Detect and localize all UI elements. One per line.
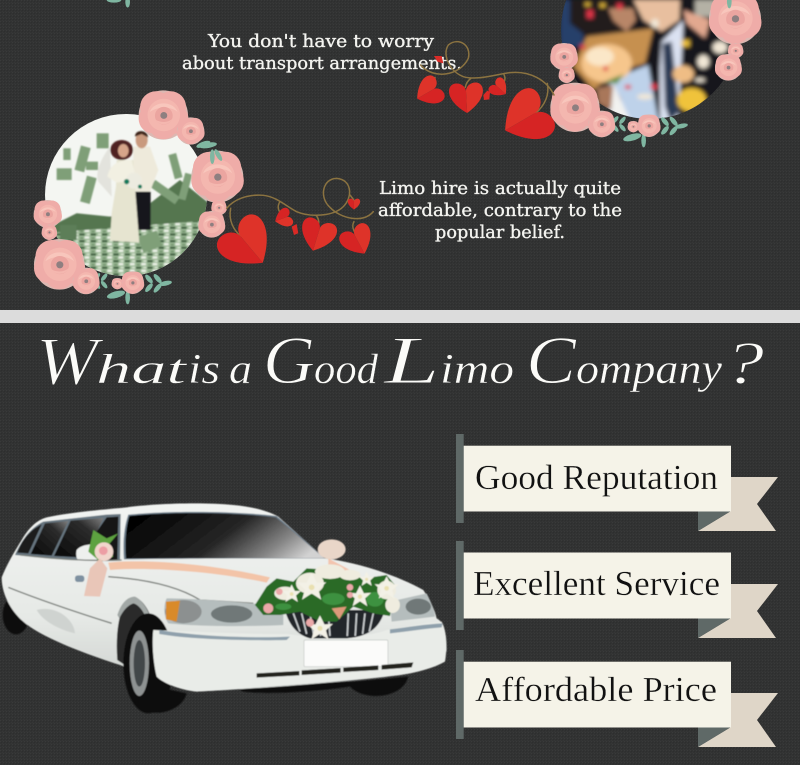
photo: decorated white wedding limousine	[2, 503, 447, 713]
leaf fragment from previous section	[107, 0, 130, 8]
icon: vine with hearts	[212, 178, 379, 280]
heading: What is a Good Limo Company?: is	[188, 347, 220, 393]
text: limo hire affordable: Limo hire is actually quite	[379, 178, 621, 199]
text: limo hire affordable: affordable, contrary to the	[378, 200, 622, 221]
photo: kissing couple with confetti	[561, 0, 730, 118]
heading: What is a Good Limo Company?: G	[263, 322, 315, 398]
heading: What is a Good Limo Company?: ood	[314, 347, 379, 393]
floral wreath: kissing couple	[550, 0, 761, 147]
lower side shading	[37, 609, 75, 633]
side windows	[15, 514, 121, 561]
flower garland on hood	[255, 539, 400, 639]
heading: What is a Good Limo Company?: hat	[96, 347, 188, 393]
panel: limo hire is affordable	[34, 90, 622, 304]
windshield	[123, 512, 325, 559]
banner: Good Reputation: Good Reputation	[475, 458, 718, 497]
text: limo hire affordable	[378, 178, 622, 243]
floral wreath: figurine	[34, 90, 244, 304]
text: limo hire affordable: popular belief.	[435, 222, 565, 243]
heading: What is a Good Limo Company?	[36, 322, 764, 399]
underside and far wheel	[233, 677, 408, 696]
heading: What is a Good Limo Company?: L	[383, 322, 440, 398]
text: transport arrangements	[182, 31, 462, 74]
text: transport arrangements: You don't have to worry	[207, 31, 435, 52]
side mirror	[76, 544, 107, 563]
rear wheel	[3, 596, 29, 634]
heading: What is a Good Limo Company?: a	[229, 347, 252, 393]
heading: What is a Good Limo Company?: C	[526, 322, 577, 398]
panel: no transport worries	[182, 0, 761, 153]
front bumper	[153, 622, 446, 692]
heading: What is a Good Limo Company?: ?	[724, 330, 764, 396]
heading: What is a Good Limo Company?: ompany	[576, 347, 722, 393]
banner: Excellent Service	[456, 541, 778, 638]
license plate	[304, 640, 388, 667]
text: transport arrangements: about transport arrangements.	[182, 53, 462, 74]
mirror bouquet	[84, 530, 118, 597]
body lines	[8, 555, 253, 623]
lower vents	[257, 662, 413, 678]
front wheel arch and wheel	[117, 597, 187, 713]
banner: Excellent Service: Excellent Service	[473, 564, 720, 603]
headlights	[164, 593, 435, 626]
banner: Good Reputation	[456, 434, 778, 531]
peach ribbon sash	[108, 561, 270, 583]
banner: Affordable Price: Affordable Price	[475, 670, 717, 709]
section divider band	[0, 310, 800, 323]
grille	[285, 610, 385, 638]
banner: Affordable Price	[456, 650, 778, 747]
heading: What is a Good Limo Company?: imo	[440, 347, 514, 393]
heading: What is a Good Limo Company?: W	[36, 323, 104, 399]
photo: bride and groom figurine with money	[45, 114, 207, 276]
door handle	[75, 575, 84, 582]
car body	[2, 503, 447, 692]
icon: vine with hearts	[410, 42, 559, 153]
